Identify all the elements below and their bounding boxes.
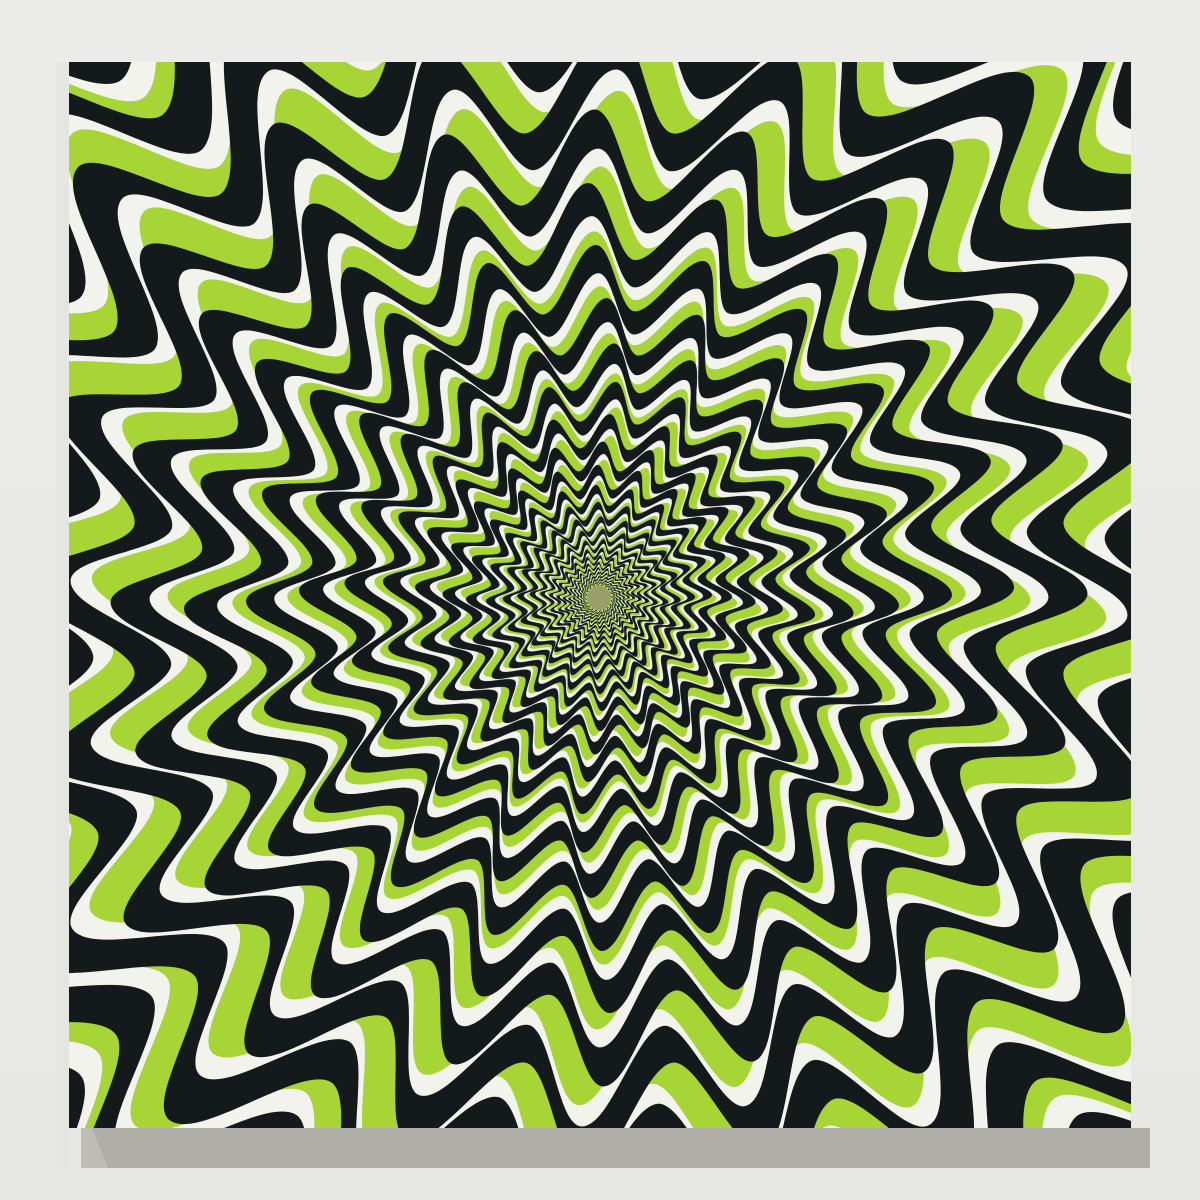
soft side shadow on wall bbox=[56, 62, 69, 1168]
cast shadow below painting bbox=[81, 1128, 1150, 1168]
painting base bbox=[69, 62, 1131, 1128]
concentric wavy bands bbox=[69, 62, 1131, 1128]
olive centre disc bbox=[587, 586, 611, 610]
painting: green, black and white op-art tunnel bbox=[69, 62, 1131, 1128]
